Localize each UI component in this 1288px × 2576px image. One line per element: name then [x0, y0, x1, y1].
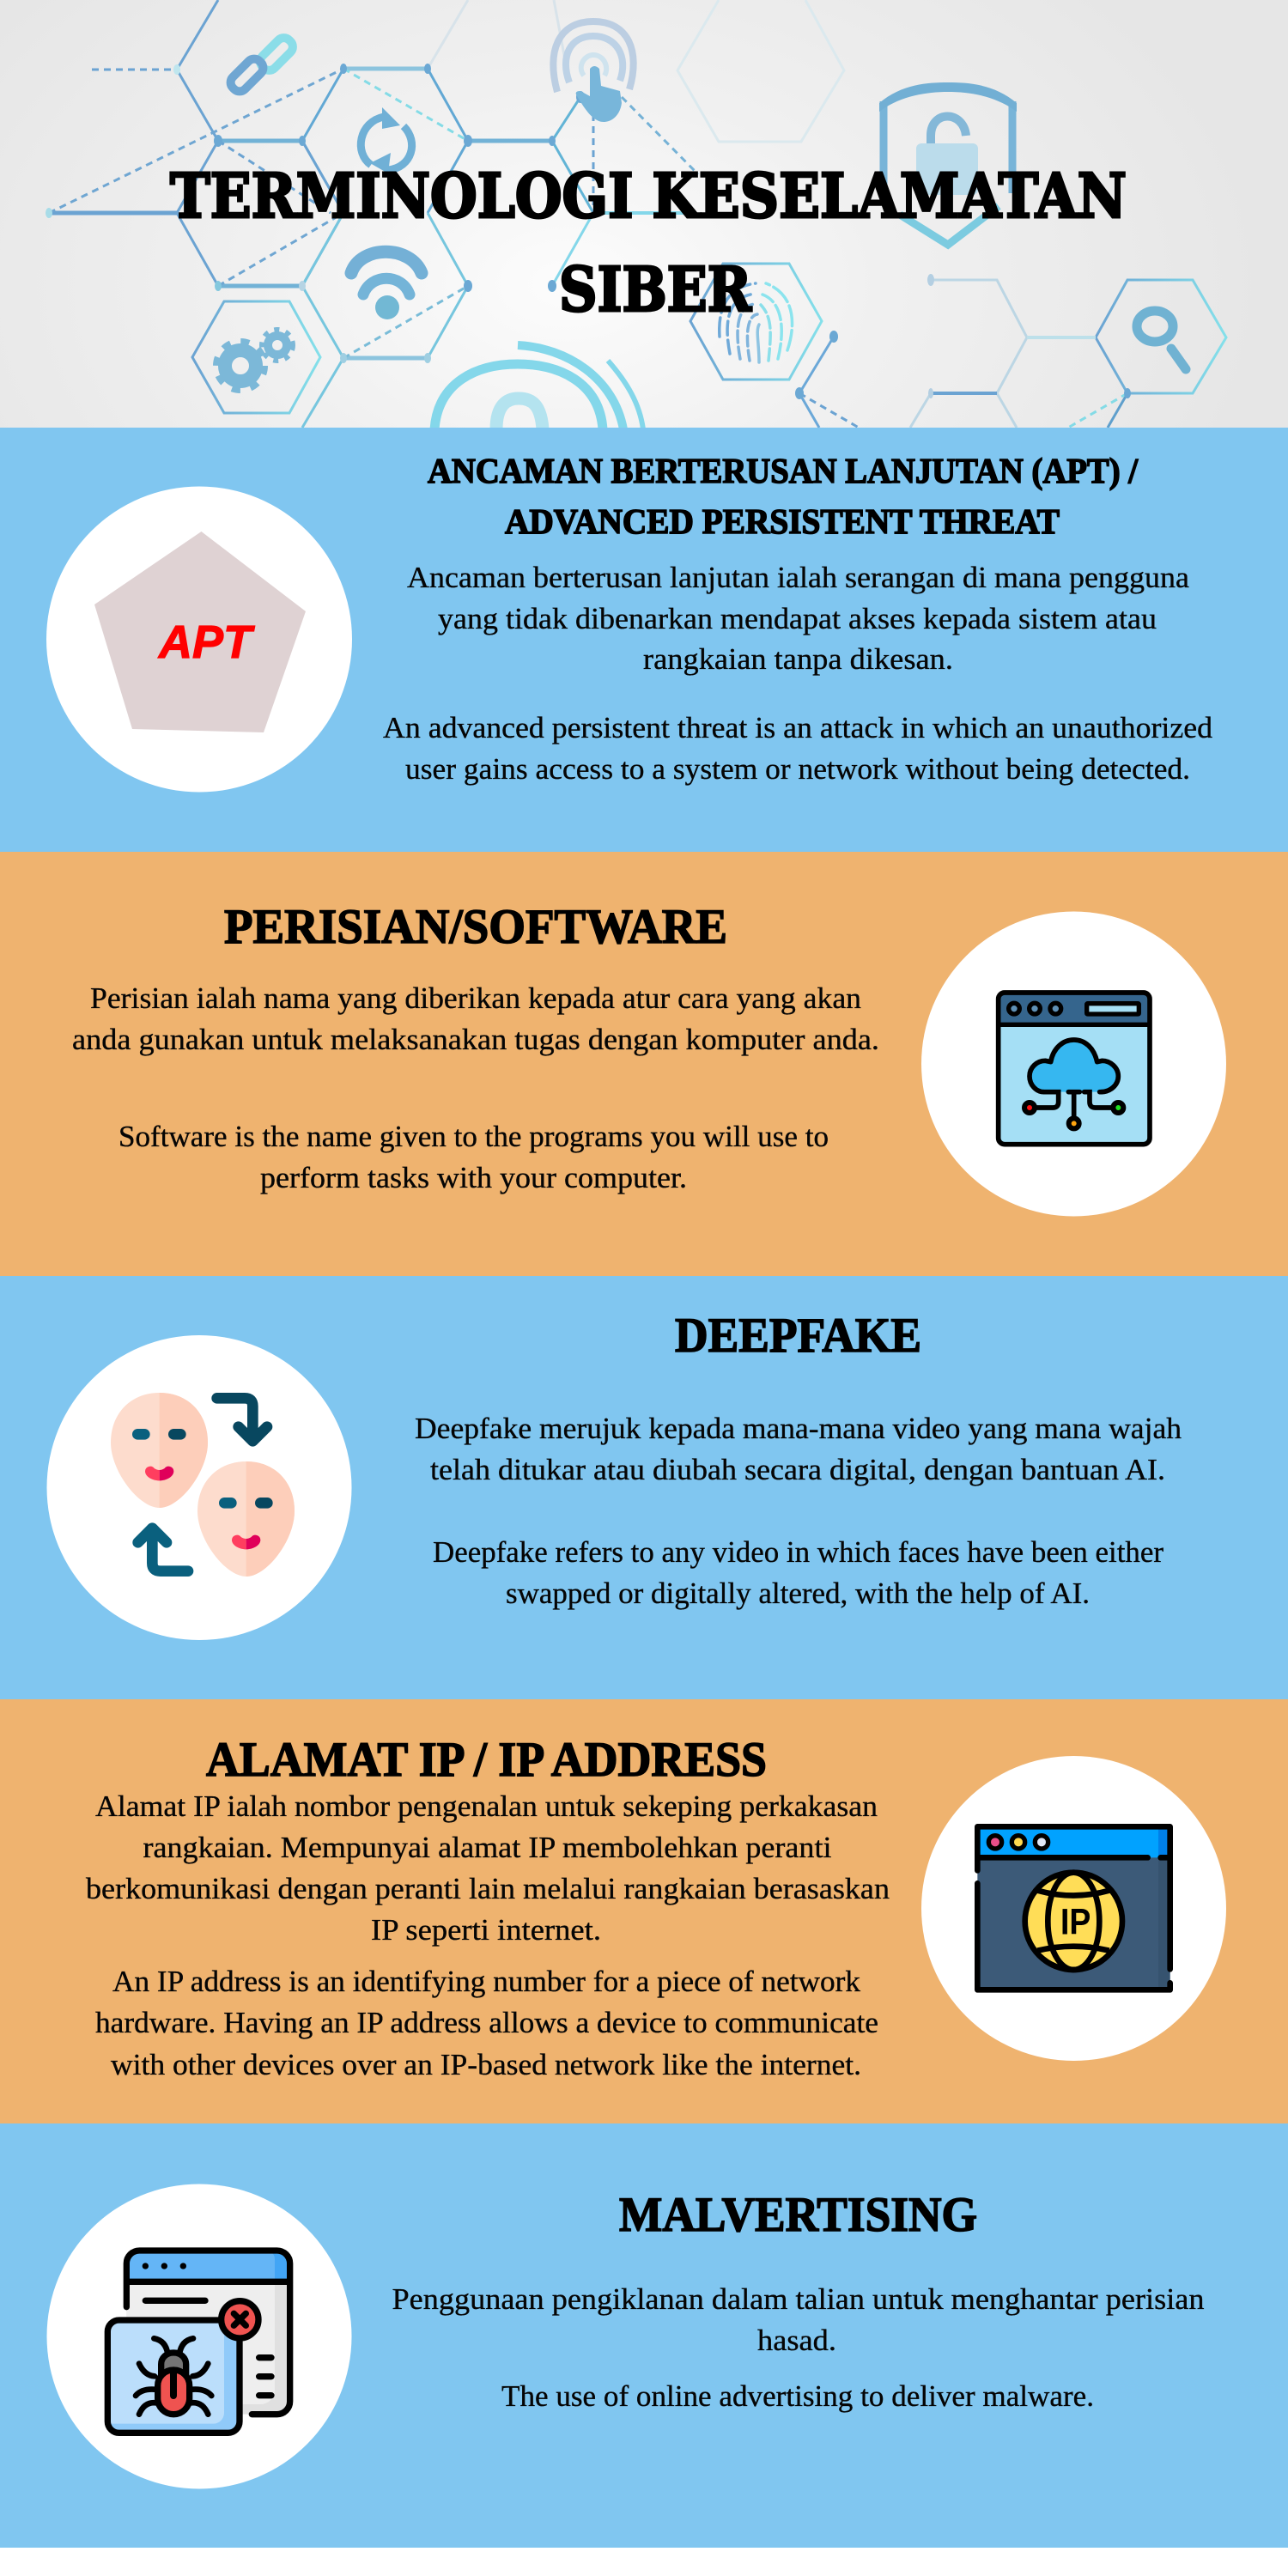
text: IP address description: IP seperti internet. — [371, 1913, 601, 1947]
title: TERMINOLOGI KESELAMATAN — [170, 160, 1127, 232]
icon: magnifier — [1137, 311, 1186, 369]
text: malvertising description: hasad. — [757, 2324, 836, 2357]
icon: APT pentagon in circle — [46, 486, 352, 792]
heading: APT: ANCAMAN BERTERUSAN LANJUTAN (APT) / — [428, 451, 1139, 490]
text: IP address description: with other devices over an IP-based network like the internet. — [111, 2048, 861, 2081]
text: software description: perform tasks with your computer. — [260, 1161, 687, 1194]
text: software description — [72, 981, 879, 1194]
text: malvertising description: The use of online advertising to deliver malware. — [501, 2379, 1094, 2413]
text: deepfake description: swapped or digitally altered, with the help of AI. — [506, 1577, 1090, 1610]
text: APT description: Ancaman berterusan lanjutan ialah serangan di mana pengguna — [407, 561, 1189, 594]
icon: wifi — [351, 252, 422, 319]
heading: APT — [428, 451, 1139, 541]
text: software description: Software is the name given to the programs you will use to — [118, 1120, 829, 1153]
text: IP address description: hardware. Having an IP address allows a device to communicate — [95, 2006, 878, 2039]
text: IP address description: An IP address is an identifying number for a piece of network — [112, 1965, 860, 1998]
text: malvertising description — [392, 2282, 1204, 2413]
text: IP address description — [86, 1789, 890, 2081]
panel: malvertising — [0, 2123, 1288, 2548]
face two — [197, 1461, 295, 1577]
text: IP address description: Alamat IP ialah nombor pengenalan untuk sekeping perkakasan — [95, 1789, 878, 1823]
icon: cloud software window in circle — [921, 912, 1226, 1216]
text: APT description: rangkaian tanpa dikesan. — [643, 642, 953, 676]
icon: touch fingerprint — [553, 21, 634, 122]
heading: software: PERISIAN/SOFTWARE — [224, 900, 727, 954]
heading: APT: ADVANCED PERSISTENT THREAT — [505, 501, 1060, 541]
heading: deepfake: DEEPFAKE — [675, 1309, 921, 1363]
face one — [111, 1393, 208, 1508]
text: malvertising description: Penggunaan pengiklanan dalam talian untuk menghantar perisian — [392, 2282, 1204, 2316]
text: deepfake description: Deepfake refers to any video in which faces have been either — [433, 1535, 1163, 1569]
panel: IP address — [0, 1699, 1288, 2123]
title — [170, 160, 1127, 325]
text: deepfake description: telah ditukar atau diubah secara digital, dengan bantuan AI. — [430, 1453, 1165, 1486]
icon: gears — [216, 330, 293, 390]
icon: fingerprint — [720, 283, 793, 362]
icon: refresh — [361, 107, 412, 173]
text: APT description: An advanced persistent threat is an attack in which an unauthorized — [383, 711, 1212, 744]
icon: radar arcs — [434, 345, 643, 429]
heading: IP address: ALAMAT IP / IP ADDRESS — [206, 1733, 767, 1787]
text: deepfake description — [415, 1412, 1182, 1610]
text: IP address description: rangkaian. Mempunyai alamat IP membolehkan peranti — [143, 1831, 832, 1864]
hexagon network — [46, 0, 1226, 428]
back window — [126, 2251, 290, 2415]
icon: APT pentagon in circle: APT — [157, 617, 255, 668]
icon: face swap in circle — [46, 1335, 352, 1640]
text: APT description — [383, 561, 1212, 786]
front window with bug — [107, 2320, 240, 2433]
panel: deepfake — [0, 1276, 1288, 1699]
text: software description: Perisian ialah nama yang diberikan kepada atur cara yang akan — [90, 981, 861, 1015]
panel: software — [0, 852, 1288, 1276]
arrow: down — [217, 1398, 267, 1441]
title: SIBER — [559, 253, 752, 325]
text: IP address description: berkomunikasi dengan peranti lain melalui rangkaian berasaskan — [86, 1872, 890, 1905]
error badge — [222, 2301, 258, 2338]
text: deepfake description: Deepfake merujuk kepada mana-mana video yang mana wajah — [415, 1412, 1182, 1445]
icon: IP globe window in circle — [921, 1756, 1226, 2061]
text: APT description: yang tidak dibenarkan mendapat akses kepada sistem atau — [438, 602, 1157, 635]
arrow: up — [138, 1528, 188, 1571]
icon: chain link — [228, 34, 296, 94]
text: software description: anda gunakan untuk melaksanakan tugas dengan komputer anda. — [72, 1023, 879, 1056]
header banner — [0, 0, 1288, 429]
heading: malvertising: MALVERTISING — [619, 2188, 977, 2242]
icon: IP globe window in circle: IP — [1060, 1901, 1091, 1942]
icon: malware bug window in circle — [46, 2184, 352, 2488]
panel: APT — [0, 428, 1288, 852]
text: APT description: user gains access to a system or network without being detected. — [405, 752, 1190, 786]
icon: shield with padlock — [879, 82, 1017, 245]
